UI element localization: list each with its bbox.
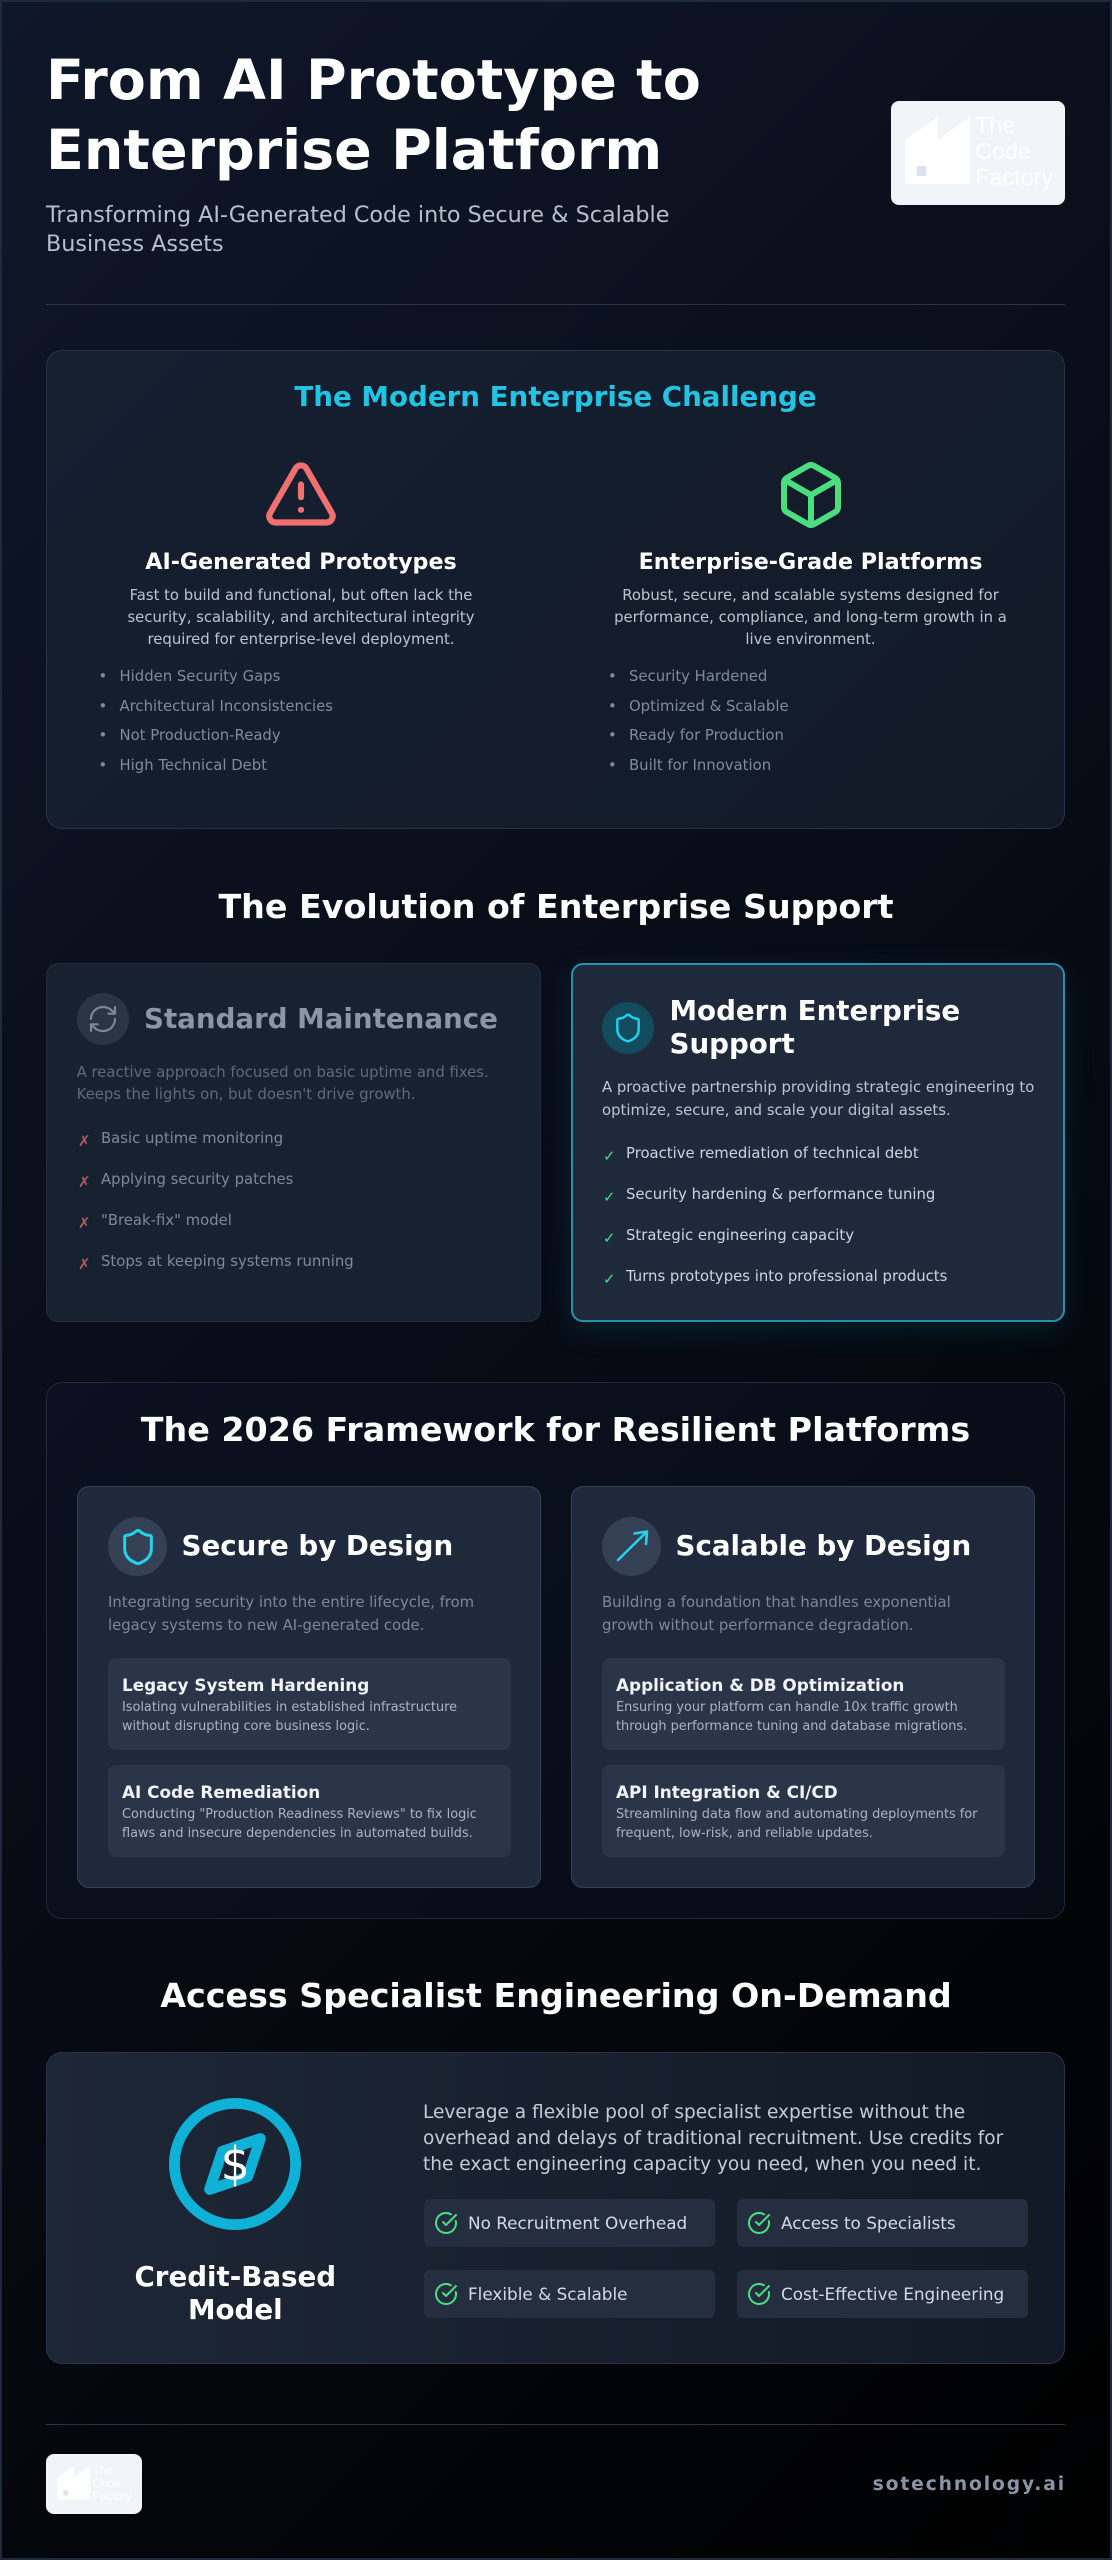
list: standard limitations — [78, 1128, 354, 1272]
list: standard limitations: Stops at keeping systems running — [101, 1252, 354, 1270]
icon: shield — [108, 1517, 167, 1576]
description: required for enterprise-level deployment. — [147, 630, 455, 648]
heading: evolution of enterprise support: The Evolution of Enterprise Support — [218, 887, 894, 926]
card: scalable by design — [571, 1486, 1035, 1888]
panel: standard maintenance: ✗ — [78, 1172, 90, 1190]
column: AI-generated prototypes — [100, 462, 475, 774]
item: AI code remediation: Conducting "Production Readiness Reviews" to fix logic — [122, 1807, 477, 1822]
list: standard limitations: Basic uptime monitoring — [101, 1128, 283, 1146]
list: modern benefits: Strategic engineering capacity — [626, 1226, 854, 1244]
subtitle: Business Assets — [46, 231, 224, 257]
list: modern benefits: Security hardening & performance tuning — [626, 1185, 935, 1203]
footer logo — [46, 2454, 142, 2514]
paragraph: overhead and delays of traditional recruitment. Use credits for — [423, 2128, 1003, 2148]
item: legacy system hardening: Legacy System Hardening — [122, 1675, 369, 1695]
pill: flexible and scalable — [424, 2270, 715, 2318]
heading: credit-based model: Credit-Based — [134, 2260, 336, 2292]
description: optimize, secure, and scale your digital assets. — [602, 1101, 951, 1119]
description: Keeps the lights on, but doesn't drive growth. — [77, 1085, 416, 1103]
description — [127, 586, 475, 648]
logo: The Code Factory: The — [975, 112, 1016, 138]
heading: modern enterprise support: Modern Enterprise — [670, 994, 960, 1026]
heading: modern enterprise support — [670, 994, 960, 1060]
item: AI code remediation: AI Code Remediation — [122, 1782, 320, 1802]
description: A proactive partnership providing strategic engineering to — [602, 1078, 1034, 1096]
list: platform strengths: Ready for Production — [629, 726, 784, 744]
icon: green cube — [781, 462, 841, 528]
list: prototype weaknesses: Architectural Inconsistencies — [120, 697, 333, 715]
website url: sotechnology.ai — [873, 2474, 1066, 2495]
heading: secure by design: Secure by Design — [182, 1529, 453, 1562]
item: API integration and CI/CD: Streamlining data flow and automating deployments for — [616, 1807, 977, 1822]
title: From AI Prototype to — [46, 48, 701, 112]
description — [614, 586, 1007, 648]
heading: modern enterprise support: Support — [670, 1027, 795, 1060]
pill: no recruitment overhead — [424, 2199, 715, 2247]
description: legacy systems to new AI-generated code. — [108, 1616, 424, 1634]
logo: The Code Factory: Code — [975, 138, 1031, 164]
list: modern benefits: Turns prototypes into professional products — [626, 1267, 947, 1285]
list: platform strengths: Security Hardened — [629, 667, 767, 685]
paragraph: the exact engineering capacity you need, when you need it. — [423, 2154, 981, 2174]
panel: standard maintenance: ✗ — [78, 1254, 90, 1272]
icon: shield — [602, 1002, 654, 1054]
item: AI code remediation: flaws and insecure dependencies in automated builds. — [122, 1826, 473, 1841]
description — [108, 1593, 474, 1634]
description: growth without performance degradation. — [602, 1616, 914, 1634]
footer logo: Code — [92, 2477, 121, 2490]
list: prototype weaknesses: High Technical Debt — [120, 756, 267, 774]
title: Enterprise Platform — [46, 118, 662, 182]
icon: credit compass: $ — [221, 2137, 250, 2191]
subtitle: Transforming AI-Generated Code into Secure & Scalable — [46, 202, 669, 228]
logo: The Code Factory: Factory — [975, 164, 1054, 190]
description: A reactive approach focused on basic uptime and fixes. — [77, 1062, 489, 1080]
item: legacy system hardening: without disrupting core business logic. — [122, 1719, 370, 1734]
title — [46, 48, 701, 182]
item: API integration and CI/CD: API Integration & CI/CD — [616, 1782, 838, 1802]
description: live environment. — [745, 630, 876, 648]
description — [602, 1593, 951, 1634]
heading: credit-based model: Model — [188, 2293, 283, 2326]
icon: refresh — [77, 993, 129, 1045]
paragraph — [423, 2102, 1004, 2174]
list: prototype weaknesses — [100, 667, 333, 774]
heading: scalable by design: Scalable by Design — [676, 1529, 971, 1562]
list: prototype weaknesses: Hidden Security Gaps — [120, 667, 280, 685]
paragraph: Leverage a flexible pool of specialist expertise without the — [423, 2102, 965, 2122]
subtitle — [46, 202, 669, 257]
footer logo: The — [92, 2464, 113, 2477]
header — [46, 48, 1065, 257]
pill: cost-effective engineering — [737, 2270, 1028, 2318]
panel: credit-based model — [46, 2052, 1065, 2364]
pill: cost-effective engineering: Cost-Effective Engineering — [781, 2284, 1004, 2304]
icon: warning triangle — [266, 462, 336, 526]
list: platform strengths: Optimized & Scalable — [629, 697, 789, 715]
description: Building a foundation that handles exponential — [602, 1593, 951, 1611]
heading: credit-based model — [134, 2260, 336, 2326]
heading: standard maintenance: Standard Maintenance — [144, 1002, 498, 1035]
challenge heading: The Modern Enterprise Challenge — [294, 380, 817, 413]
item: API integration and CI/CD: frequent, low-risk, and reliable updates. — [616, 1826, 873, 1841]
pill: flexible and scalable: Flexible & Scalable — [468, 2284, 628, 2304]
description: performance, compliance, and long-term growth in a — [614, 608, 1007, 626]
item: application and DB optimization: Ensuring your platform can handle 10x traffic growth — [616, 1700, 958, 1715]
item: application and DB optimization: through performance tuning and database migrations. — [616, 1719, 967, 1734]
list: modern benefits: Proactive remediation of technical debt — [626, 1144, 919, 1162]
card: secure by design — [77, 1486, 541, 1888]
icon: growth arrow — [602, 1517, 661, 1576]
footer logo: Factory — [92, 2490, 132, 2503]
list: platform strengths — [610, 667, 789, 774]
panel: standard maintenance: ✗ — [78, 1132, 90, 1150]
heading: access specialist engineering: Access Specialist Engineering On-Demand — [160, 1976, 952, 2015]
column: enterprise-grade platforms — [610, 462, 1007, 774]
description: Robust, secure, and scalable systems designed for — [622, 586, 999, 604]
list: modern benefits — [603, 1144, 947, 1288]
description — [602, 1078, 1034, 1119]
panel: modern enterprise support: ✓ — [603, 1188, 615, 1206]
list: standard limitations: Applying security patches — [101, 1170, 293, 1188]
description: Integrating security into the entire lifecycle, from — [108, 1593, 474, 1611]
pill: access to specialists — [737, 2199, 1028, 2247]
item: AI code remediation — [108, 1765, 511, 1857]
framework heading: The 2026 Framework for Resilient Platforms — [141, 1410, 970, 1449]
description — [76, 1062, 489, 1103]
panel: modern enterprise support: ✓ — [603, 1229, 615, 1247]
pill: no recruitment overhead: No Recruitment Overhead — [468, 2213, 687, 2233]
panel: the modern enterprise challenge — [46, 350, 1065, 829]
description: security, scalability, and architectural integrity — [127, 608, 475, 626]
logo: The Code Factory — [891, 101, 1065, 205]
heading: enterprise-grade platforms: Enterprise-Grade Platforms — [639, 548, 982, 574]
footer — [46, 2454, 1066, 2514]
panel: modern enterprise support: ✓ — [603, 1147, 615, 1165]
pill: access to specialists: Access to Specialists — [781, 2213, 956, 2233]
list: prototype weaknesses: Not Production-Ready — [120, 726, 281, 744]
item: legacy system hardening: Isolating vulnerabilities in established infrastructure — [122, 1700, 457, 1715]
item: legacy system hardening — [108, 1658, 511, 1750]
panel: 2026 framework — [46, 1382, 1065, 1919]
item: API integration and CI/CD — [602, 1765, 1005, 1857]
heading: AI-generated prototypes: AI-Generated Prototypes — [145, 548, 457, 574]
list: standard limitations: "Break-fix" model — [101, 1210, 232, 1228]
item: application and DB optimization — [602, 1658, 1005, 1750]
item: application and DB optimization: Application & DB Optimization — [616, 1675, 904, 1695]
panel: modern enterprise support: ✓ — [603, 1270, 615, 1288]
panel: modern enterprise support — [571, 963, 1065, 1322]
list: platform strengths: Built for Innovation — [629, 756, 771, 774]
panel: standard maintenance — [46, 963, 541, 1322]
description: Fast to build and functional, but often lack the — [130, 586, 472, 604]
icon: credit compass — [169, 2098, 301, 2230]
panel: standard maintenance: ✗ — [78, 1214, 90, 1232]
